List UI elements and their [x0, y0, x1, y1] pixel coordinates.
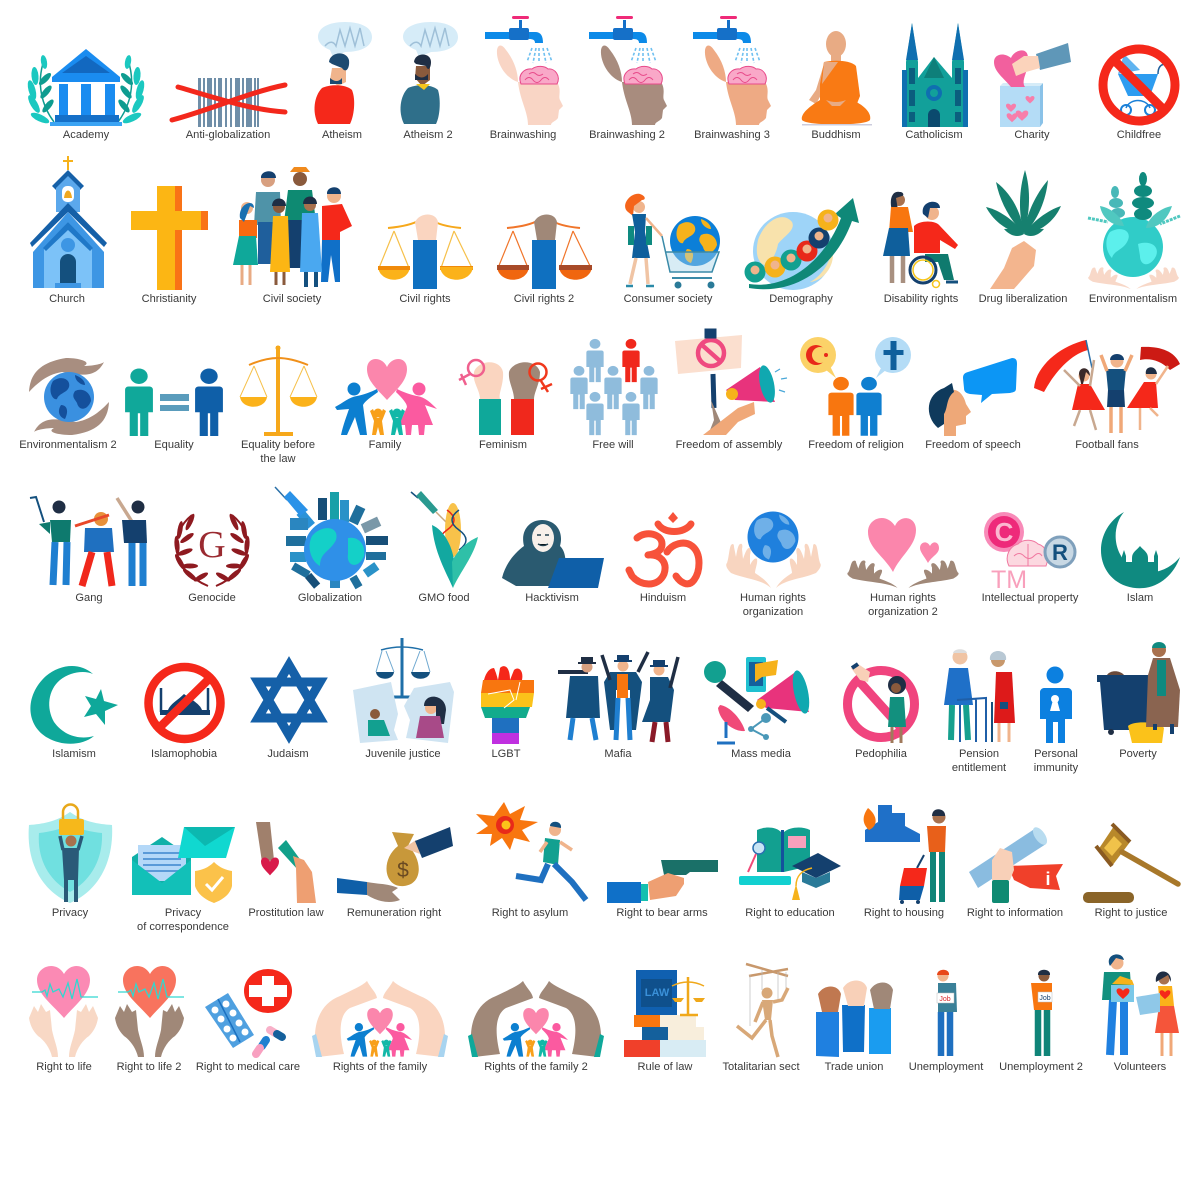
- icon: Right to justice: [1083, 824, 1178, 919]
- icon: Trade union: Trade union: [825, 1061, 883, 1073]
- icon: Right to housing: [864, 805, 946, 919]
- icon: Pension entitlement: entitlement: [952, 762, 1006, 774]
- icon: LGBT: [481, 666, 534, 760]
- icon: Intellectual property: TM: [991, 566, 1027, 594]
- icon: Brainwashing 3: Brainwashing 3: [694, 129, 770, 141]
- icon: Civil society: Civil society: [263, 293, 322, 305]
- icon: Brainwashing 3: [693, 16, 771, 141]
- icon: Buddhism: Buddhism: [811, 129, 861, 141]
- icon: Equality before the law: Equality before: [241, 439, 315, 451]
- icon: Disability rights: [883, 192, 959, 305]
- icon: Privacy of correspondence: of correspondence: [137, 921, 229, 933]
- icon: Personal immunity: [1034, 666, 1079, 774]
- icon: Islamophobia: [148, 667, 220, 760]
- icon: Right to education: [739, 828, 841, 919]
- icon: Trade union: [816, 980, 893, 1073]
- icon: Brainwashing: [485, 16, 563, 141]
- icon: Hacktivism: [502, 520, 604, 604]
- icon: Human rights organization: Human rights: [740, 592, 806, 604]
- icon: Pedophilia: [848, 664, 914, 760]
- icon: Equality before the law: [240, 346, 317, 465]
- icon: Equality: Equality: [154, 439, 194, 451]
- icon: Freedom of religion: [800, 337, 911, 451]
- icon: Environmentalism: Environmentalism: [1089, 293, 1177, 305]
- icon: Right to life: [29, 966, 98, 1073]
- icon: Unemployment: [909, 970, 983, 1073]
- icon: Islam: Islam: [1127, 592, 1153, 604]
- icon: Freedom of assembly: [675, 331, 787, 451]
- icon: Judaism: [258, 665, 320, 760]
- icon: Remuneration right: [337, 827, 453, 919]
- icon: Equality before the law: the law: [260, 453, 297, 465]
- icon: Hinduism: [629, 512, 699, 604]
- icon: Rights of the family: [312, 981, 448, 1073]
- icon: Church: [30, 156, 107, 305]
- icon: Hacktivism: Hacktivism: [525, 592, 579, 604]
- icon: Remuneration right: $: [397, 859, 409, 882]
- icon: Human rights organization: [726, 512, 821, 618]
- icon: Unemployment: Job: [939, 996, 951, 1003]
- icon: Privacy: [29, 804, 112, 919]
- icon: Right to information: Right to information: [967, 907, 1063, 919]
- icon: Catholicism: Catholicism: [905, 129, 963, 141]
- icon: Genocide: [173, 513, 251, 604]
- icon: Feminism: Feminism: [479, 439, 527, 451]
- icon: Globalization: Globalization: [298, 592, 362, 604]
- icon: Football fans: [1034, 340, 1180, 451]
- icon: Consumer society: Consumer society: [624, 293, 713, 305]
- icon: Human rights organization 2: organization 2: [868, 606, 938, 618]
- icon: Human rights organization: organization: [743, 606, 803, 618]
- icon: Unemployment 2: Unemployment 2: [999, 1061, 1083, 1073]
- icon: Buddhism: [802, 31, 872, 141]
- icon: Genocide: G: [198, 524, 226, 566]
- icon: Church: Church: [49, 293, 85, 305]
- icon: Human rights organization 2: [847, 518, 959, 618]
- icon: Right to education: Right to education: [745, 907, 835, 919]
- icon: Drug liberalization: [979, 170, 1067, 305]
- icon: Civil rights: Civil rights: [399, 293, 451, 305]
- icon: Privacy: Privacy: [52, 907, 89, 919]
- icon: Right to justice: Right to justice: [1095, 907, 1167, 919]
- icon: Childfree: [1103, 49, 1175, 141]
- icon: Right to medical care: [196, 969, 300, 1073]
- icon: Right to life 2: Right to life 2: [117, 1061, 181, 1073]
- icon: Mafia: [558, 652, 678, 760]
- icon: Rule of law: [624, 970, 706, 1073]
- icon: Intellectual property: R: [1052, 540, 1068, 565]
- icon: Right to bear arms: Right to bear arms: [616, 907, 708, 919]
- icon: Human rights organization 2: Human rights: [870, 592, 936, 604]
- icon: Free will: Free will: [592, 439, 634, 451]
- icon: Personal immunity: immunity: [1034, 762, 1079, 774]
- icon: Genocide: Genocide: [188, 592, 236, 604]
- icon: Civil rights 2: Civil rights 2: [514, 293, 574, 305]
- icon: Demography: [744, 198, 859, 305]
- icon: Volunteers: Volunteers: [1114, 1061, 1167, 1073]
- icon: Civil society: [233, 167, 352, 305]
- icon: Rule of law: Rule of law: [638, 1061, 693, 1073]
- icon: Gang: [30, 497, 147, 604]
- icon: LGBT: LGBT: [492, 748, 521, 760]
- icon: Gang: Gang: [75, 592, 103, 604]
- icon: Poverty: Poverty: [1119, 748, 1157, 760]
- icon: Brainwashing 2: Brainwashing 2: [589, 129, 665, 141]
- icon: Freedom of speech: [925, 358, 1021, 451]
- icon: Privacy of correspondence: [132, 827, 235, 933]
- icon: Hinduism: Hinduism: [640, 592, 686, 604]
- icon: Remuneration right: Remuneration right: [347, 907, 441, 919]
- icon: Prostitution law: Prostitution law: [248, 907, 325, 919]
- icon: Judaism: Judaism: [267, 748, 309, 760]
- icon: Privacy of correspondence: Privacy: [165, 907, 202, 919]
- icon: Feminism: [459, 360, 552, 451]
- icon: Totalitarian sect: Totalitarian sect: [722, 1061, 800, 1073]
- icon: Atheism: [315, 22, 372, 141]
- icon: Right to medical care: Right to medical care: [196, 1061, 300, 1073]
- icon: Football fans: Football fans: [1075, 439, 1139, 451]
- icon: Pension entitlement: Pension: [959, 748, 999, 760]
- icon: Right to housing: Right to housing: [864, 907, 944, 919]
- icon: GMO food: [411, 491, 478, 604]
- icon: Intellectual property: Intellectual property: [982, 592, 1079, 604]
- icon: Personal immunity: Personal: [1034, 748, 1078, 760]
- icon: Right to information: i: [1045, 869, 1051, 889]
- icon: Unemployment: Unemployment: [909, 1061, 983, 1073]
- icon: Brainwashing 2: [589, 16, 667, 141]
- icon: GMO food: GMO food: [418, 592, 470, 604]
- icon: Freedom of assembly: Freedom of assembly: [676, 439, 783, 451]
- icon: Islam: [1101, 512, 1180, 604]
- icon: Catholicism: [902, 23, 968, 141]
- icon: Islamism: [30, 666, 118, 760]
- icon: Family: Family: [369, 439, 402, 451]
- icon: Disability rights: Disability rights: [884, 293, 959, 305]
- icon: Right to asylum: Right to asylum: [492, 907, 568, 919]
- icon: Juvenile justice: Juvenile justice: [365, 748, 441, 760]
- icon: Anti-globalization: [172, 78, 285, 141]
- icon: Freedom of religion: Freedom of religion: [808, 439, 904, 451]
- icon: Rights of the family 2: [468, 981, 604, 1073]
- icon: Atheism 2: [401, 22, 458, 141]
- icon: Freedom of speech: Freedom of speech: [925, 439, 1021, 451]
- icon: Civil rights: [378, 214, 473, 305]
- icon: Environmentalism: [1088, 172, 1180, 305]
- icon: Rights of the family: Rights of the family: [333, 1061, 428, 1073]
- icon: Environmentalism 2: [19, 358, 117, 451]
- icon: Atheism 2: Atheism 2: [403, 129, 453, 141]
- icon: Mass media: Mass media: [731, 748, 792, 760]
- icon: Demography: Demography: [769, 293, 833, 305]
- icon: Intellectual property: C: [995, 517, 1014, 547]
- icon: Consumer society: [624, 194, 720, 305]
- icon: Globalization: [275, 487, 388, 604]
- icon: Mass media: [704, 657, 812, 760]
- icon: Environmentalism 2: Environmentalism 2: [19, 439, 117, 451]
- icon: Juvenile justice: [353, 638, 454, 760]
- icon: Volunteers: [1102, 954, 1179, 1073]
- icon: Family: [335, 359, 437, 451]
- icon: Drug liberalization: Drug liberalization: [979, 293, 1067, 305]
- icon: Free will: [570, 339, 658, 451]
- icon: Academy: [26, 49, 146, 141]
- icon: Poverty: [1097, 642, 1180, 760]
- icon: Islamism: Islamism: [52, 748, 96, 760]
- icon: Mafia: Mafia: [604, 748, 632, 760]
- icon: Academy: Academy: [63, 129, 110, 141]
- icon: Right to asylum: [476, 802, 586, 919]
- icon: Christianity: [131, 186, 208, 305]
- icon: Atheism: Atheism: [322, 129, 362, 141]
- icon: Unemployment 2: Job: [1039, 995, 1051, 1002]
- icon: Brainwashing: Brainwashing: [490, 129, 556, 141]
- icon: Rights of the family 2: Rights of the family 2: [484, 1061, 588, 1073]
- icon: Childfree: Childfree: [1117, 129, 1161, 141]
- icon: Right to information: [967, 825, 1063, 919]
- icon: Civil rights 2: [497, 214, 592, 305]
- icon: Christianity: Christianity: [142, 293, 197, 305]
- icon: Right to life: Right to life: [36, 1061, 92, 1073]
- icon: Unemployment 2: [999, 970, 1083, 1073]
- icon: Anti-globalization: Anti-globalization: [186, 129, 270, 141]
- icon: Totalitarian sect: [722, 964, 800, 1073]
- icon: Right to bear arms: [607, 860, 718, 919]
- icon: Right to life 2: [115, 966, 184, 1073]
- icon: Prostitution law: [248, 822, 325, 919]
- icon: Pension entitlement: [944, 649, 1015, 774]
- icon: Equality: [125, 368, 223, 451]
- icon: Pedophilia: Pedophilia: [855, 748, 908, 760]
- icon: Islamophobia: Islamophobia: [151, 748, 218, 760]
- icon: Rule of law: LAW: [645, 987, 670, 999]
- icon: Charity: Charity: [1014, 129, 1050, 141]
- icon: Charity: [994, 43, 1071, 141]
- icon: Intellectual property: [982, 512, 1079, 604]
